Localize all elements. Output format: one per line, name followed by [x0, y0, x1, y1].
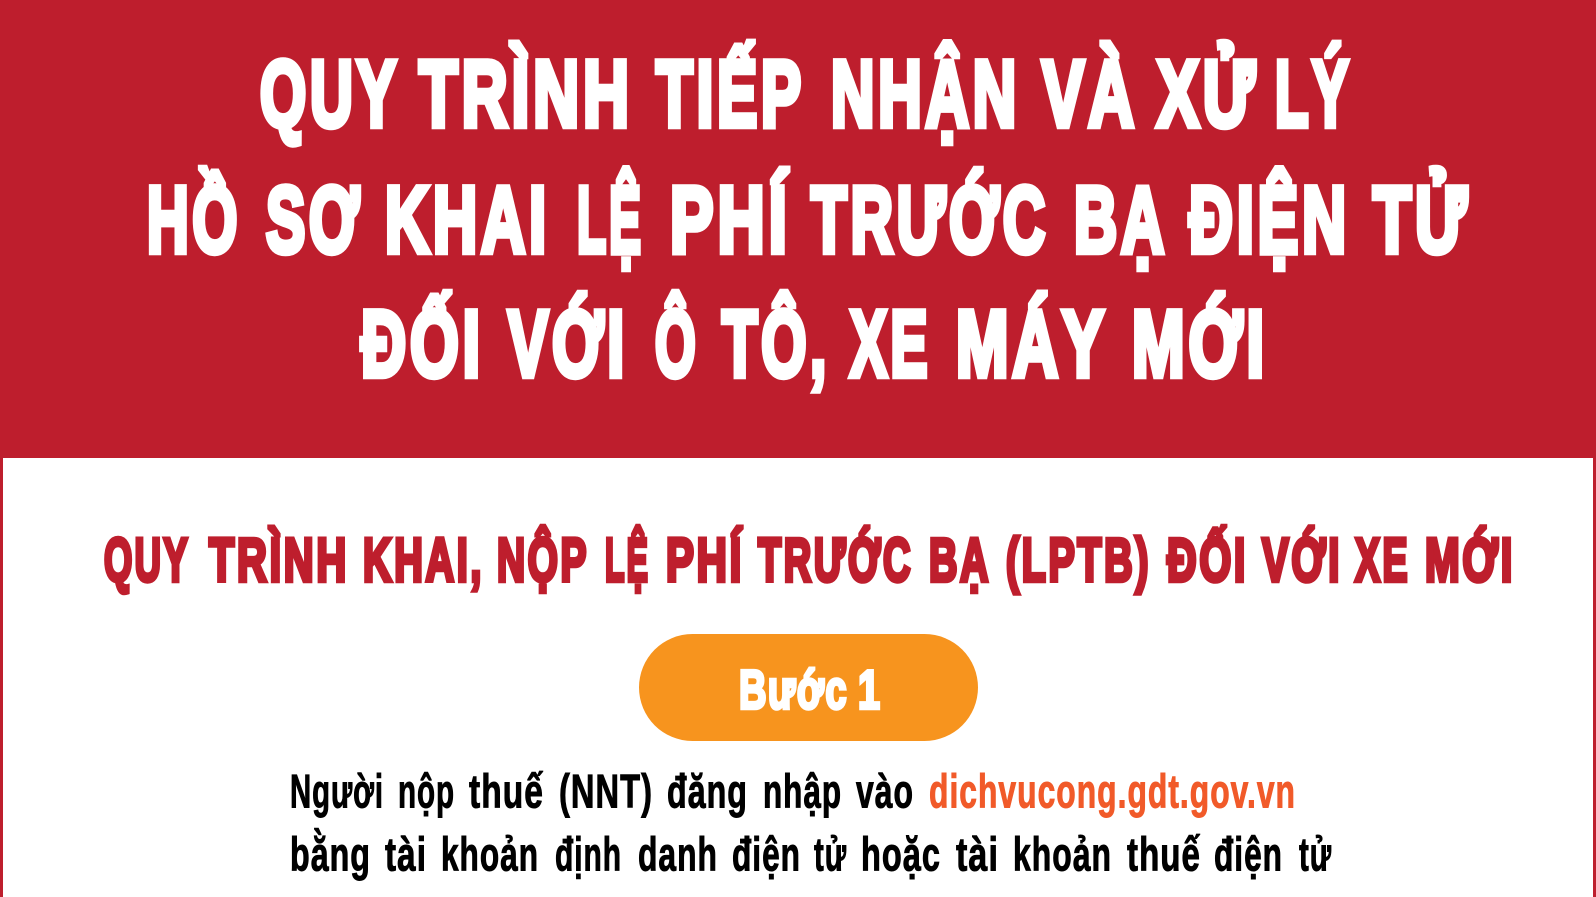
section heading: VỚI — [1262, 526, 1342, 594]
step description: định — [555, 828, 622, 881]
step description: đăng — [667, 765, 748, 818]
title: NHẬN — [831, 41, 1020, 146]
section heading: QUY — [104, 526, 190, 594]
title: QUY — [260, 41, 400, 146]
title: XE — [850, 291, 931, 396]
step description — [290, 765, 1332, 881]
step description: tài — [385, 828, 427, 881]
title: TIẾP — [656, 41, 805, 146]
title: VỚI — [508, 291, 628, 396]
title: VÀ — [1042, 41, 1138, 146]
section heading: TRƯỚC — [758, 526, 913, 594]
title — [147, 41, 1471, 396]
step description: điện — [1214, 828, 1283, 881]
section heading: ĐỐI — [1167, 526, 1248, 594]
step description: điện — [732, 828, 801, 881]
step description: nhập — [763, 765, 842, 818]
step description: vào — [856, 765, 914, 818]
section heading: MỚI — [1425, 526, 1515, 594]
title: BẠ — [1074, 167, 1168, 272]
title: MÁY — [956, 291, 1108, 396]
step description: tử — [814, 828, 847, 881]
title: TÔ, — [722, 291, 830, 396]
section heading: KHAI, — [363, 526, 484, 594]
title: TRƯỚC — [811, 167, 1049, 272]
section heading: XE — [1355, 526, 1410, 594]
step description: thuế — [469, 765, 544, 818]
section heading: LỆ — [605, 526, 650, 594]
step description: hoặc — [861, 828, 941, 881]
step description: khoản — [1013, 828, 1112, 881]
title: XỬ — [1157, 41, 1259, 146]
step description: thuế — [1127, 828, 1201, 881]
step description: Người — [290, 765, 384, 818]
step description: bằng — [290, 828, 371, 881]
step badge: Bước 1: Bước — [739, 658, 848, 720]
title: ĐỐI — [361, 291, 484, 396]
step description: khoản — [441, 828, 539, 881]
title: TỬ — [1373, 167, 1471, 272]
step description: danh — [638, 828, 718, 881]
title: ĐIỆN — [1189, 167, 1350, 272]
title: SƠ — [266, 167, 363, 272]
step description: tử — [1299, 828, 1332, 881]
step description: tài — [956, 828, 999, 881]
step badge: Bước 1 — [639, 634, 978, 741]
title: Ô — [655, 291, 699, 396]
step description: (NNT) — [559, 765, 653, 818]
section heading: BẠ — [929, 526, 991, 594]
section heading — [104, 526, 1515, 594]
title: HỒ — [147, 167, 241, 272]
step description: nộp — [398, 765, 455, 818]
section heading: NỘP — [497, 526, 589, 594]
title: LỆ — [577, 167, 644, 272]
title: MỚI — [1132, 291, 1268, 396]
header banner — [0, 0, 1596, 458]
page frame: red side borders — [2, 440, 1594, 897]
title: KHAI — [385, 167, 550, 272]
section heading: PHÍ — [666, 526, 744, 594]
title: PHÍ — [670, 167, 791, 272]
step description: dichvucong.gdt.gov.vn — [929, 765, 1296, 818]
title: LÝ — [1275, 41, 1352, 146]
section heading: (LPTB) — [1006, 526, 1151, 594]
title: TRÌNH — [419, 41, 633, 146]
section heading: TRÌNH — [209, 526, 349, 594]
step badge: Bước 1: 1 — [858, 658, 880, 720]
